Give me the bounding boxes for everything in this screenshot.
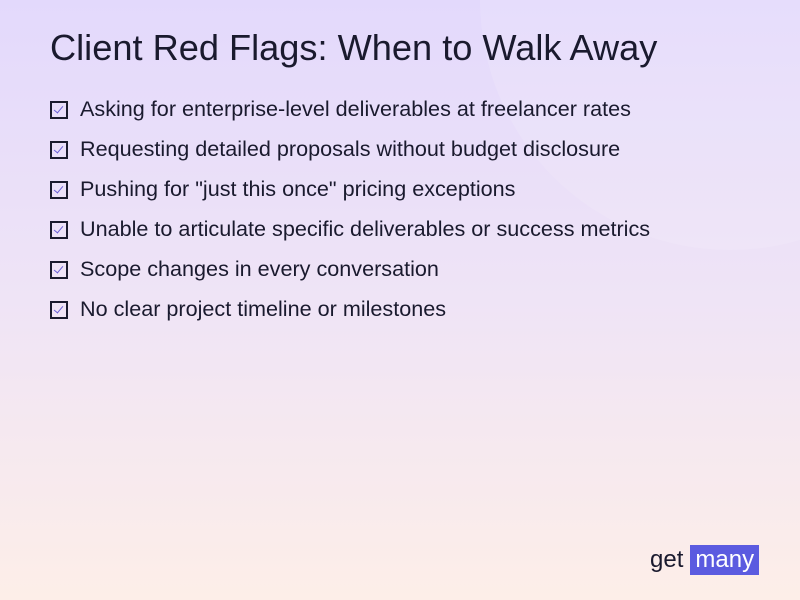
item 3: Pushing for "just this once" pricing exceptions bbox=[80, 176, 515, 201]
logo: get bbox=[650, 546, 683, 573]
item 4: Unable to articulate specific deliverables or success metrics bbox=[80, 216, 650, 241]
item 1: Asking for enterprise-level deliverables at freelancer rates bbox=[80, 96, 631, 121]
item 6: No clear project timeline or milestones bbox=[80, 296, 446, 321]
checklist bbox=[50, 96, 650, 321]
item 2: Requesting detailed proposals without budget disclosure bbox=[80, 136, 620, 161]
logo: many bbox=[695, 546, 754, 573]
title: Client Red Flags: When to Walk Away bbox=[50, 27, 657, 68]
logo bbox=[650, 545, 759, 575]
item 5: Scope changes in every conversation bbox=[80, 256, 439, 281]
